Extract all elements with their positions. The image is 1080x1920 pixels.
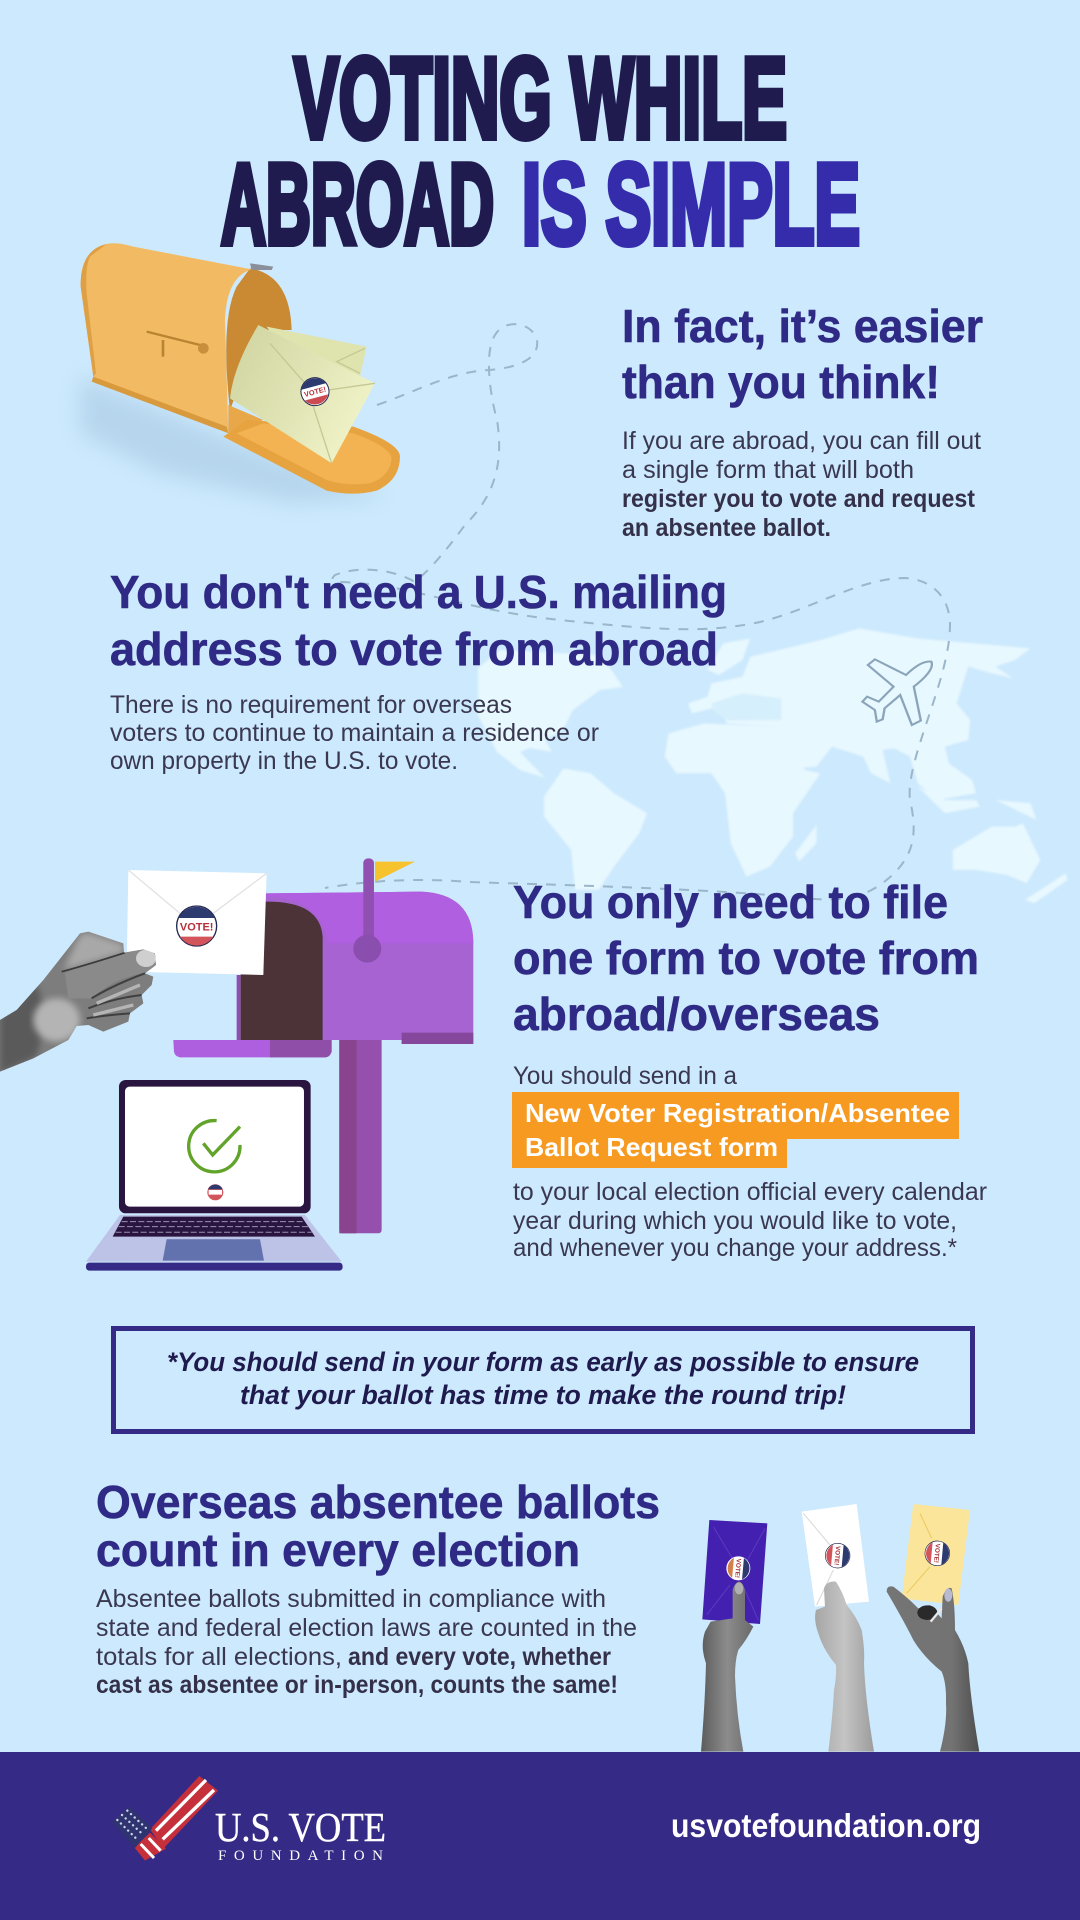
sticker: vote: VOTE! [303, 385, 327, 399]
yellow envelope [902, 1504, 970, 1605]
text: no residence requirement: own property in the U.S. to vote. [110, 747, 458, 775]
text: absentee ballots counted [96, 1585, 637, 1699]
left hand [701, 1582, 753, 1752]
sticker: vote: VOTE! [180, 922, 213, 934]
purple envelope: VOTE! [733, 1558, 742, 1578]
illustration: laptop with check mark [86, 1080, 343, 1271]
illustration: white envelope with vote sticker [127, 870, 267, 975]
title: ABROAD [221, 142, 494, 268]
text: send every calendar year: year during which you would like to vote, [513, 1207, 957, 1235]
callout: orange form name highlight: New Voter Registration/Absentee [525, 1098, 950, 1128]
white envelope: VOTE! [832, 1546, 841, 1566]
text: send every calendar year: to your local election official every calendar [513, 1178, 987, 1206]
icon: airplane outline [862, 659, 932, 725]
callout: send early note: that your ballot has time to make the round trip! [240, 1380, 846, 1410]
text: no residence requirement: voters to continue to maintain a residence or [110, 719, 599, 747]
dashed flight path [325, 324, 950, 899]
text: one form heading: abroad/overseas [513, 988, 880, 1040]
heading: no U.S. mailing address needed: address to vote from abroad [110, 623, 718, 675]
text: absentee ballots counted: Absentee ballots submitted in compliance with [96, 1585, 606, 1613]
callout: send early note: *You should send in your form as early as possible to ensure [167, 1347, 919, 1377]
text: fill out a single form: register you to vote and request [622, 485, 976, 513]
heading: ballots count: count in every election [96, 1524, 580, 1576]
illustration: yellow mailbox with envelope [80, 243, 400, 503]
sticker: vote [298, 375, 332, 409]
illustration: three hands holding envelopes [701, 1504, 979, 1752]
heading: easier than you think: than you think! [622, 356, 940, 408]
world map [478, 628, 1068, 903]
white envelope [802, 1504, 869, 1607]
heading: no U.S. mailing address needed: You don't need a U.S. mailing [110, 566, 727, 618]
logo: U.S. Vote Foundation [112, 1776, 386, 1864]
text: fill out a single form: a single form that will both [622, 456, 914, 484]
title [221, 36, 860, 268]
text: one form heading [513, 876, 979, 1040]
website url: usvotefoundation.org [671, 1807, 981, 1844]
text: you should send in a: You should send in a [513, 1062, 737, 1090]
text: absentee ballots counted: state and federal election laws are counted in the [96, 1614, 637, 1642]
yellow envelope: VOTE! [932, 1543, 941, 1563]
text: send every calendar year [513, 1178, 987, 1262]
heading: easier than you think [622, 300, 983, 408]
callout: send early note [114, 1328, 972, 1432]
illustration: hand holding envelope [0, 932, 156, 1072]
heading: ballots count [96, 1476, 660, 1576]
text: one form heading: one form to vote from [513, 932, 979, 984]
right hand [887, 1586, 979, 1752]
heading: ballots count: Overseas absentee ballots [96, 1476, 660, 1528]
text: absentee ballots counted: cast as absentee or in-person, counts the same! [96, 1671, 618, 1699]
text: send every calendar year: and whenever you change your address.* [513, 1234, 957, 1262]
title: IS SIMPLE [522, 142, 860, 268]
illustration: purple mailbox [173, 858, 473, 1233]
heading: no U.S. mailing address needed [110, 566, 727, 675]
logo: U.S. Vote Foundation: U.S. VOTE [215, 1804, 386, 1850]
callout: orange form name highlight: Ballot Request form [525, 1132, 778, 1162]
text: fill out a single form: an absentee ballot. [622, 514, 831, 542]
text: fill out a single form [622, 427, 981, 542]
icon: flag check mark [112, 1776, 218, 1861]
heading: easier than you think: In fact, it’s easier [622, 300, 983, 352]
text: one form heading: You only need to file [513, 876, 948, 928]
text: fill out a single form: If you are abroad, you can fill out [622, 427, 981, 455]
text: no residence requirement [110, 691, 599, 775]
middle hand [815, 1582, 874, 1752]
callout: orange form name highlight [512, 1092, 959, 1168]
footer band [0, 1752, 1080, 1920]
text: absentee ballots counted: and every vote, whether [348, 1643, 611, 1671]
purple envelope [702, 1520, 767, 1624]
logo: U.S. Vote Foundation: FOUNDATION [218, 1848, 383, 1864]
text: no residence requirement: There is no requirement for overseas [110, 691, 512, 719]
text: absentee ballots counted: totals for all elections, [96, 1643, 342, 1671]
